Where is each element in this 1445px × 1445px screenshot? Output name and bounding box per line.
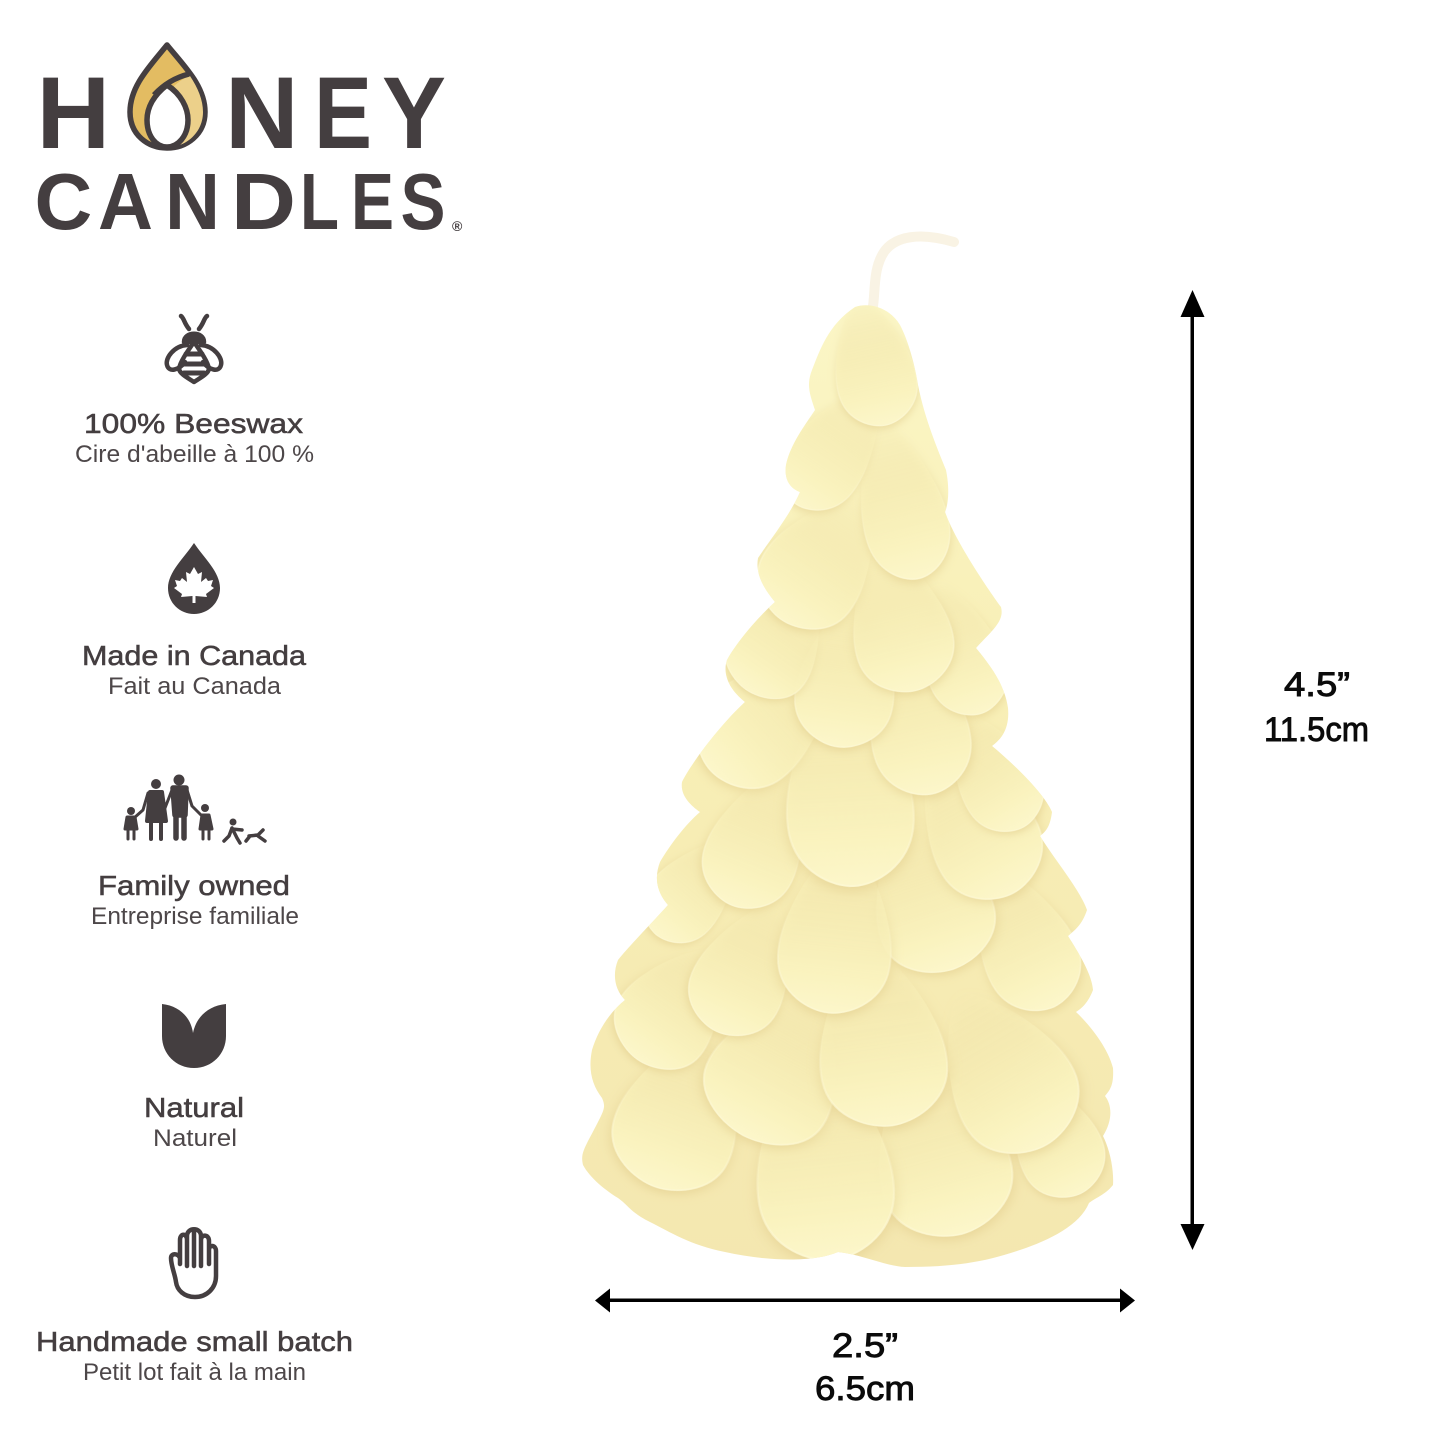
petals: bottom tier bbox=[608, 1092, 1108, 1260]
label: width: 2.5” bbox=[832, 1327, 898, 1365]
French label: Entreprise familiale bbox=[91, 903, 299, 930]
candle: beeswax tree bbox=[582, 237, 1119, 1267]
label: height: 11.5cm bbox=[1264, 711, 1369, 749]
French label: Naturel bbox=[153, 1125, 237, 1152]
feature: 100% Beeswax bbox=[75, 316, 314, 468]
label: height: 4.5” bbox=[1284, 666, 1350, 704]
logo letter H: H bbox=[36, 56, 110, 170]
label: width: 6.5cm bbox=[815, 1370, 915, 1408]
label: height bbox=[1264, 666, 1369, 749]
heading: Family owned bbox=[98, 870, 290, 901]
heading: Natural bbox=[144, 1092, 244, 1123]
petals: upper tier bbox=[696, 684, 1046, 836]
candle petals bbox=[597, 284, 1119, 1267]
feature: Family owned bbox=[91, 774, 299, 930]
petals: upper middle tier bbox=[699, 782, 1046, 914]
icon: bee bbox=[167, 316, 221, 382]
feature: Made in Canada bbox=[82, 543, 306, 700]
heading: 100% Beeswax bbox=[84, 408, 303, 439]
logo word CANDLES: D bbox=[231, 157, 296, 246]
icon: leaf bbox=[162, 1004, 226, 1068]
logo word CANDLES bbox=[34, 157, 446, 246]
logo flame icon bbox=[130, 45, 205, 148]
French label: Petit lot fait à la main bbox=[83, 1359, 306, 1386]
arrow: height dimension bbox=[1180, 290, 1204, 1250]
heading: Handmade small batch bbox=[36, 1326, 353, 1357]
logo word CANDLES: A bbox=[98, 157, 153, 246]
wick bbox=[872, 237, 954, 312]
feature: Handmade small batch bbox=[36, 1229, 353, 1386]
icon: hand bbox=[171, 1229, 216, 1297]
logo bbox=[34, 45, 463, 246]
label: width bbox=[815, 1327, 915, 1408]
heading: Made in Canada bbox=[82, 640, 306, 671]
candle silhouette bbox=[582, 305, 1113, 1267]
petals: top tiers bbox=[726, 311, 1006, 720]
logo word CANDLES: N bbox=[165, 157, 220, 246]
logo letters NEY: N bbox=[225, 56, 299, 170]
registered mark: ® bbox=[452, 218, 463, 234]
logo word CANDLES: C bbox=[34, 157, 92, 246]
logo letters NEY: Y bbox=[382, 56, 446, 170]
arrow: width dimension bbox=[595, 1288, 1135, 1312]
petals: middle tier bbox=[646, 870, 1084, 1040]
French label: Cire d'abeille à 100 % bbox=[75, 441, 314, 468]
logo word CANDLES: L bbox=[300, 157, 339, 246]
logo letters NEY: E bbox=[314, 56, 372, 170]
logo letters NEY bbox=[225, 56, 446, 170]
logo word CANDLES: S bbox=[400, 157, 446, 246]
feature: Natural bbox=[144, 1004, 244, 1152]
French label: Fait au Canada bbox=[108, 673, 282, 700]
logo word CANDLES: E bbox=[351, 157, 394, 246]
icon: family bbox=[125, 774, 265, 843]
petals: lower middle tier bbox=[610, 983, 1084, 1160]
icon: drop with maple leaf bbox=[168, 543, 220, 614]
